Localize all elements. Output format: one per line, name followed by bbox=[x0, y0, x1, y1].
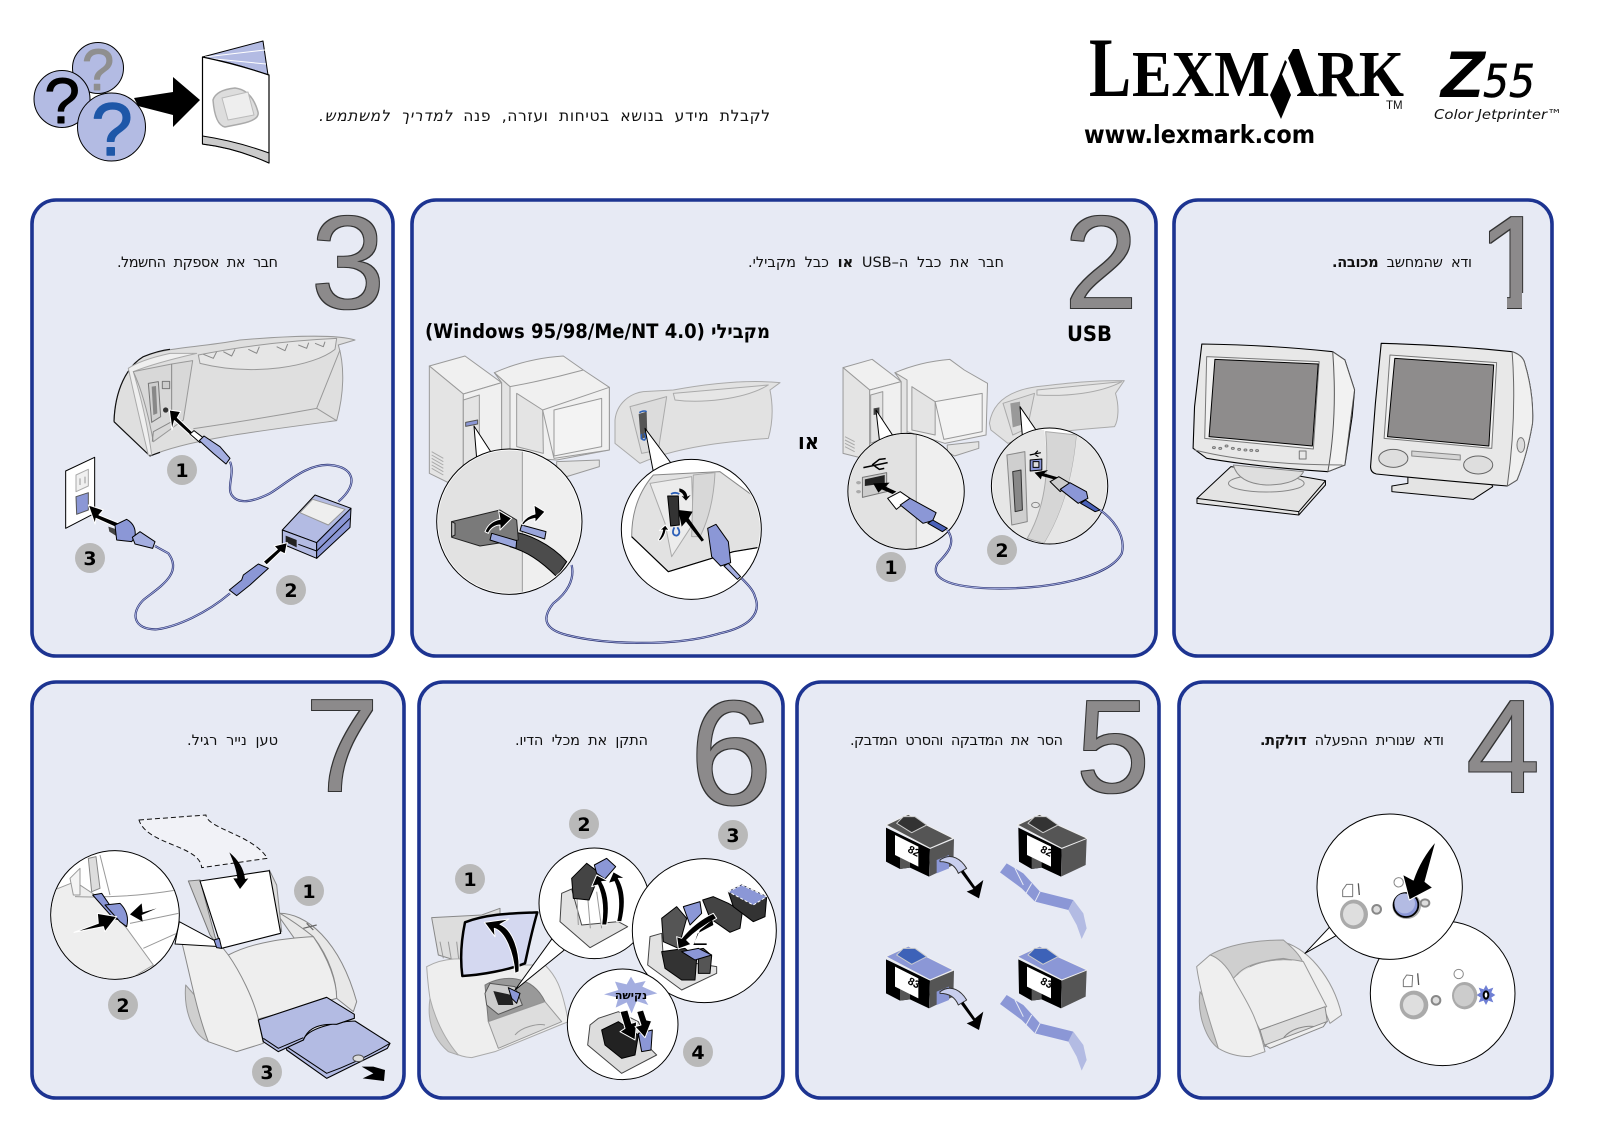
carrier 3 bbox=[648, 933, 717, 990]
paper stack bbox=[200, 871, 281, 948]
instruction 4: ודא שנורית ההפעלה דולקת. bbox=[1260, 733, 1444, 749]
instruction 3: חבר את אספקת החשמל. bbox=[117, 255, 278, 271]
insert arrows bbox=[677, 913, 717, 949]
access cover bbox=[461, 912, 537, 976]
arrow pointing to booklet bbox=[134, 77, 200, 127]
button bbox=[1400, 973, 1440, 1019]
callout wedges bbox=[876, 407, 1036, 440]
zoom circle: printer USB port bbox=[991, 428, 1110, 544]
icon: blue question bubble bbox=[78, 88, 146, 171]
illustration: printer and power button bbox=[1197, 814, 1515, 1066]
or label: או bbox=[798, 430, 819, 455]
badge 1 bbox=[294, 876, 324, 906]
small arrows bbox=[679, 488, 691, 501]
appliance connector bbox=[229, 564, 268, 596]
parallel plug bbox=[708, 524, 731, 566]
instruction 6: התקן את מכלי הדיו. bbox=[515, 733, 648, 749]
printer rear bbox=[989, 381, 1124, 443]
USB plug bbox=[1050, 477, 1070, 492]
icon: grey question bubble: ? bbox=[82, 38, 114, 103]
wall outlet bbox=[66, 457, 95, 528]
computer monitor bbox=[494, 356, 609, 477]
badge 1 bbox=[876, 552, 906, 582]
wordmark bbox=[1089, 21, 1404, 119]
step number 6: 6 bbox=[690, 671, 772, 836]
badge 2: 2 bbox=[284, 580, 298, 602]
colour cartridge bbox=[1017, 946, 1087, 1008]
wordmark: EXM bbox=[1132, 38, 1270, 111]
badge 2 bbox=[569, 809, 599, 839]
printer front bbox=[1197, 940, 1342, 1057]
zoom circle: printer port bbox=[621, 459, 763, 599]
heading: USB: USB bbox=[1067, 322, 1112, 346]
colour cartridge with tape bbox=[886, 946, 983, 1030]
step number 1: 1 bbox=[1477, 189, 1551, 336]
thumbscrews bbox=[490, 533, 517, 548]
zoom circle: press button bbox=[1317, 814, 1462, 959]
output tray bbox=[258, 997, 390, 1078]
power button and light bbox=[1452, 969, 1495, 1009]
burst bbox=[604, 977, 657, 1013]
removed tape bbox=[1000, 863, 1087, 939]
badge 1 bbox=[167, 455, 197, 485]
illustration: monitors bbox=[1193, 343, 1533, 515]
removed tape bbox=[1000, 995, 1087, 1071]
icon: black question bubble bbox=[34, 65, 90, 137]
computer tower bbox=[429, 356, 502, 490]
printer rear bbox=[114, 336, 355, 456]
badge 1 bbox=[455, 864, 485, 894]
illustration: printer rear and power cords bbox=[66, 336, 355, 629]
callout wedge bbox=[515, 938, 564, 990]
computer monitor bbox=[895, 359, 988, 456]
badge 2: 2 bbox=[577, 814, 591, 836]
turn arrows bbox=[485, 511, 512, 533]
arrow to outlet bbox=[88, 505, 119, 527]
step number 2: 2 bbox=[1064, 189, 1138, 336]
badge 3 bbox=[718, 820, 748, 850]
badge 3 bbox=[75, 543, 105, 573]
button bbox=[1340, 883, 1381, 929]
lift arrows 2 bbox=[592, 875, 608, 925]
zoom circle: paper guide bbox=[50, 851, 179, 985]
carrier bbox=[485, 983, 522, 1014]
computer tower bbox=[843, 359, 901, 460]
panel: step 5 remove tape bbox=[797, 673, 1159, 1098]
pull arrow bbox=[362, 1067, 385, 1081]
instruction 7: טען נייר רגיל. bbox=[187, 733, 278, 749]
power adapter bbox=[282, 495, 351, 558]
installed cartridges bbox=[662, 948, 697, 980]
USB plug bbox=[888, 492, 910, 509]
zoom circle 3 bbox=[632, 859, 776, 1003]
parallel connector bbox=[452, 510, 518, 546]
arrow to adapter bbox=[263, 543, 287, 565]
icon: grey question bubble bbox=[72, 38, 124, 103]
zoom circle: computer USB port bbox=[847, 432, 965, 550]
insert arrow bbox=[678, 510, 704, 542]
label 83: 83 bbox=[1038, 975, 1054, 991]
icon: blue question bubble: ? bbox=[91, 88, 133, 171]
illustration: USB connection bbox=[843, 359, 1124, 588]
label 82: 82 bbox=[906, 844, 922, 860]
step number 5: 5 bbox=[1076, 673, 1150, 820]
icon: user guide booklet bbox=[202, 41, 269, 163]
arrow bbox=[873, 483, 896, 494]
panel: step 1 computer off bbox=[1174, 189, 1552, 656]
badge 2: 2 bbox=[116, 995, 130, 1017]
panel: step 3 power supply bbox=[32, 189, 393, 656]
instruction 5: הסר את המדבקה והסרט המדבק. bbox=[850, 733, 1063, 749]
badge 1: 1 bbox=[302, 881, 316, 903]
parallel port bbox=[668, 496, 679, 526]
step number 3: 3 bbox=[311, 189, 385, 336]
zoom circle: light on bbox=[1370, 921, 1515, 1066]
header help icon: question marks, arrow and booklet bbox=[34, 38, 269, 171]
badge 2 bbox=[987, 535, 1017, 565]
squeeze arrows bbox=[74, 913, 117, 932]
printer open bbox=[427, 908, 568, 1058]
printer rear bbox=[615, 381, 780, 463]
website url: www.lexmark.com bbox=[1084, 120, 1315, 149]
carrier 2 bbox=[560, 889, 628, 948]
panel: step 6 install cartridges bbox=[419, 671, 783, 1098]
trademark: TM bbox=[1386, 100, 1403, 112]
badge 2 bbox=[108, 990, 138, 1020]
wall plug bbox=[108, 519, 155, 548]
arrow bbox=[1035, 470, 1061, 481]
USB port bbox=[856, 473, 887, 497]
product name Z55: Z bbox=[1439, 37, 1487, 111]
product subtitle: Color Jetprinter™ bbox=[1434, 107, 1562, 123]
badge 3 bbox=[252, 1057, 282, 1087]
USB port bbox=[1030, 451, 1042, 471]
step number 4: 4 bbox=[1466, 673, 1540, 820]
loose cartridges bbox=[703, 897, 742, 932]
Lexmark logo bbox=[1084, 21, 1404, 149]
badge 4 bbox=[683, 1037, 713, 1067]
product name Z55: 55 bbox=[1483, 55, 1535, 108]
badge 3: 3 bbox=[260, 1062, 274, 1084]
carrier 4 bbox=[588, 1012, 657, 1073]
callout wedges bbox=[474, 426, 672, 472]
instruction 1: ודא שהמחשב מכובה. bbox=[1332, 255, 1472, 271]
label 82: 82 bbox=[1038, 844, 1054, 860]
header note text: לקבלת מידע בנושא בטיחות ועזרה, פנה למדריך למשתמש. bbox=[319, 107, 770, 125]
callout wedge bbox=[1305, 927, 1336, 953]
barrel plug bbox=[190, 431, 230, 464]
lift arrow bbox=[484, 919, 519, 973]
badge 4: 4 bbox=[691, 1042, 705, 1064]
burst label: נקישה bbox=[615, 989, 647, 1002]
badge 2: 2 bbox=[995, 540, 1009, 562]
black cartridge bbox=[1017, 814, 1087, 877]
illustration: parallel connection bbox=[429, 356, 780, 643]
panel: step 2 connect cable bbox=[412, 189, 1156, 656]
parallel cable bbox=[546, 565, 757, 643]
power button bbox=[1392, 878, 1429, 919]
paper arrow bbox=[229, 852, 248, 889]
press arrows bbox=[620, 1010, 637, 1040]
dashed paper bbox=[139, 815, 267, 868]
zoom circle 4 bbox=[567, 969, 678, 1080]
badge 1: 1 bbox=[884, 557, 898, 579]
panel: step 7 load paper bbox=[32, 672, 404, 1098]
illustration: load paper bbox=[50, 815, 390, 1081]
USB symbol bbox=[863, 459, 888, 469]
zoom circle: computer port bbox=[433, 447, 586, 597]
panel: step 4 power light bbox=[1179, 673, 1552, 1098]
badge 2 bbox=[276, 575, 306, 605]
black cartridge with tape bbox=[886, 814, 983, 898]
illustration: cartridges and tape bbox=[886, 814, 1087, 1071]
badge 1: 1 bbox=[175, 460, 189, 482]
instruction 2: חבר את כבל ה–USB או כבל מקבילי. bbox=[748, 255, 1004, 271]
paper support bbox=[188, 880, 220, 948]
step number 7: 7 bbox=[305, 672, 379, 819]
arrow to power jack bbox=[169, 410, 197, 439]
press arrow bbox=[1403, 841, 1436, 900]
printer body bbox=[182, 913, 357, 1052]
power cables bbox=[136, 462, 352, 629]
illustration: cartridges bbox=[427, 848, 776, 1080]
product name Z55 bbox=[1434, 37, 1562, 123]
guide tab bbox=[214, 938, 222, 948]
zoom circle 2 bbox=[539, 848, 650, 959]
heading: parallel: מקבילי (Windows 95/98/Me/NT 4.0) bbox=[425, 320, 770, 343]
monitor left bbox=[1193, 344, 1355, 515]
paper guide tab bbox=[93, 893, 120, 920]
guide zoom wedge bbox=[175, 922, 220, 947]
monitor right bbox=[1371, 343, 1533, 499]
badge 3: 3 bbox=[726, 825, 740, 847]
USB cable bbox=[936, 510, 1123, 588]
badge 1: 1 bbox=[463, 869, 477, 891]
wordmark: L bbox=[1089, 21, 1131, 115]
badge 3: 3 bbox=[83, 548, 97, 570]
wordmark: RK bbox=[1317, 38, 1404, 111]
icon: black question bubble: ? bbox=[44, 65, 80, 137]
label 83: 83 bbox=[906, 975, 922, 991]
